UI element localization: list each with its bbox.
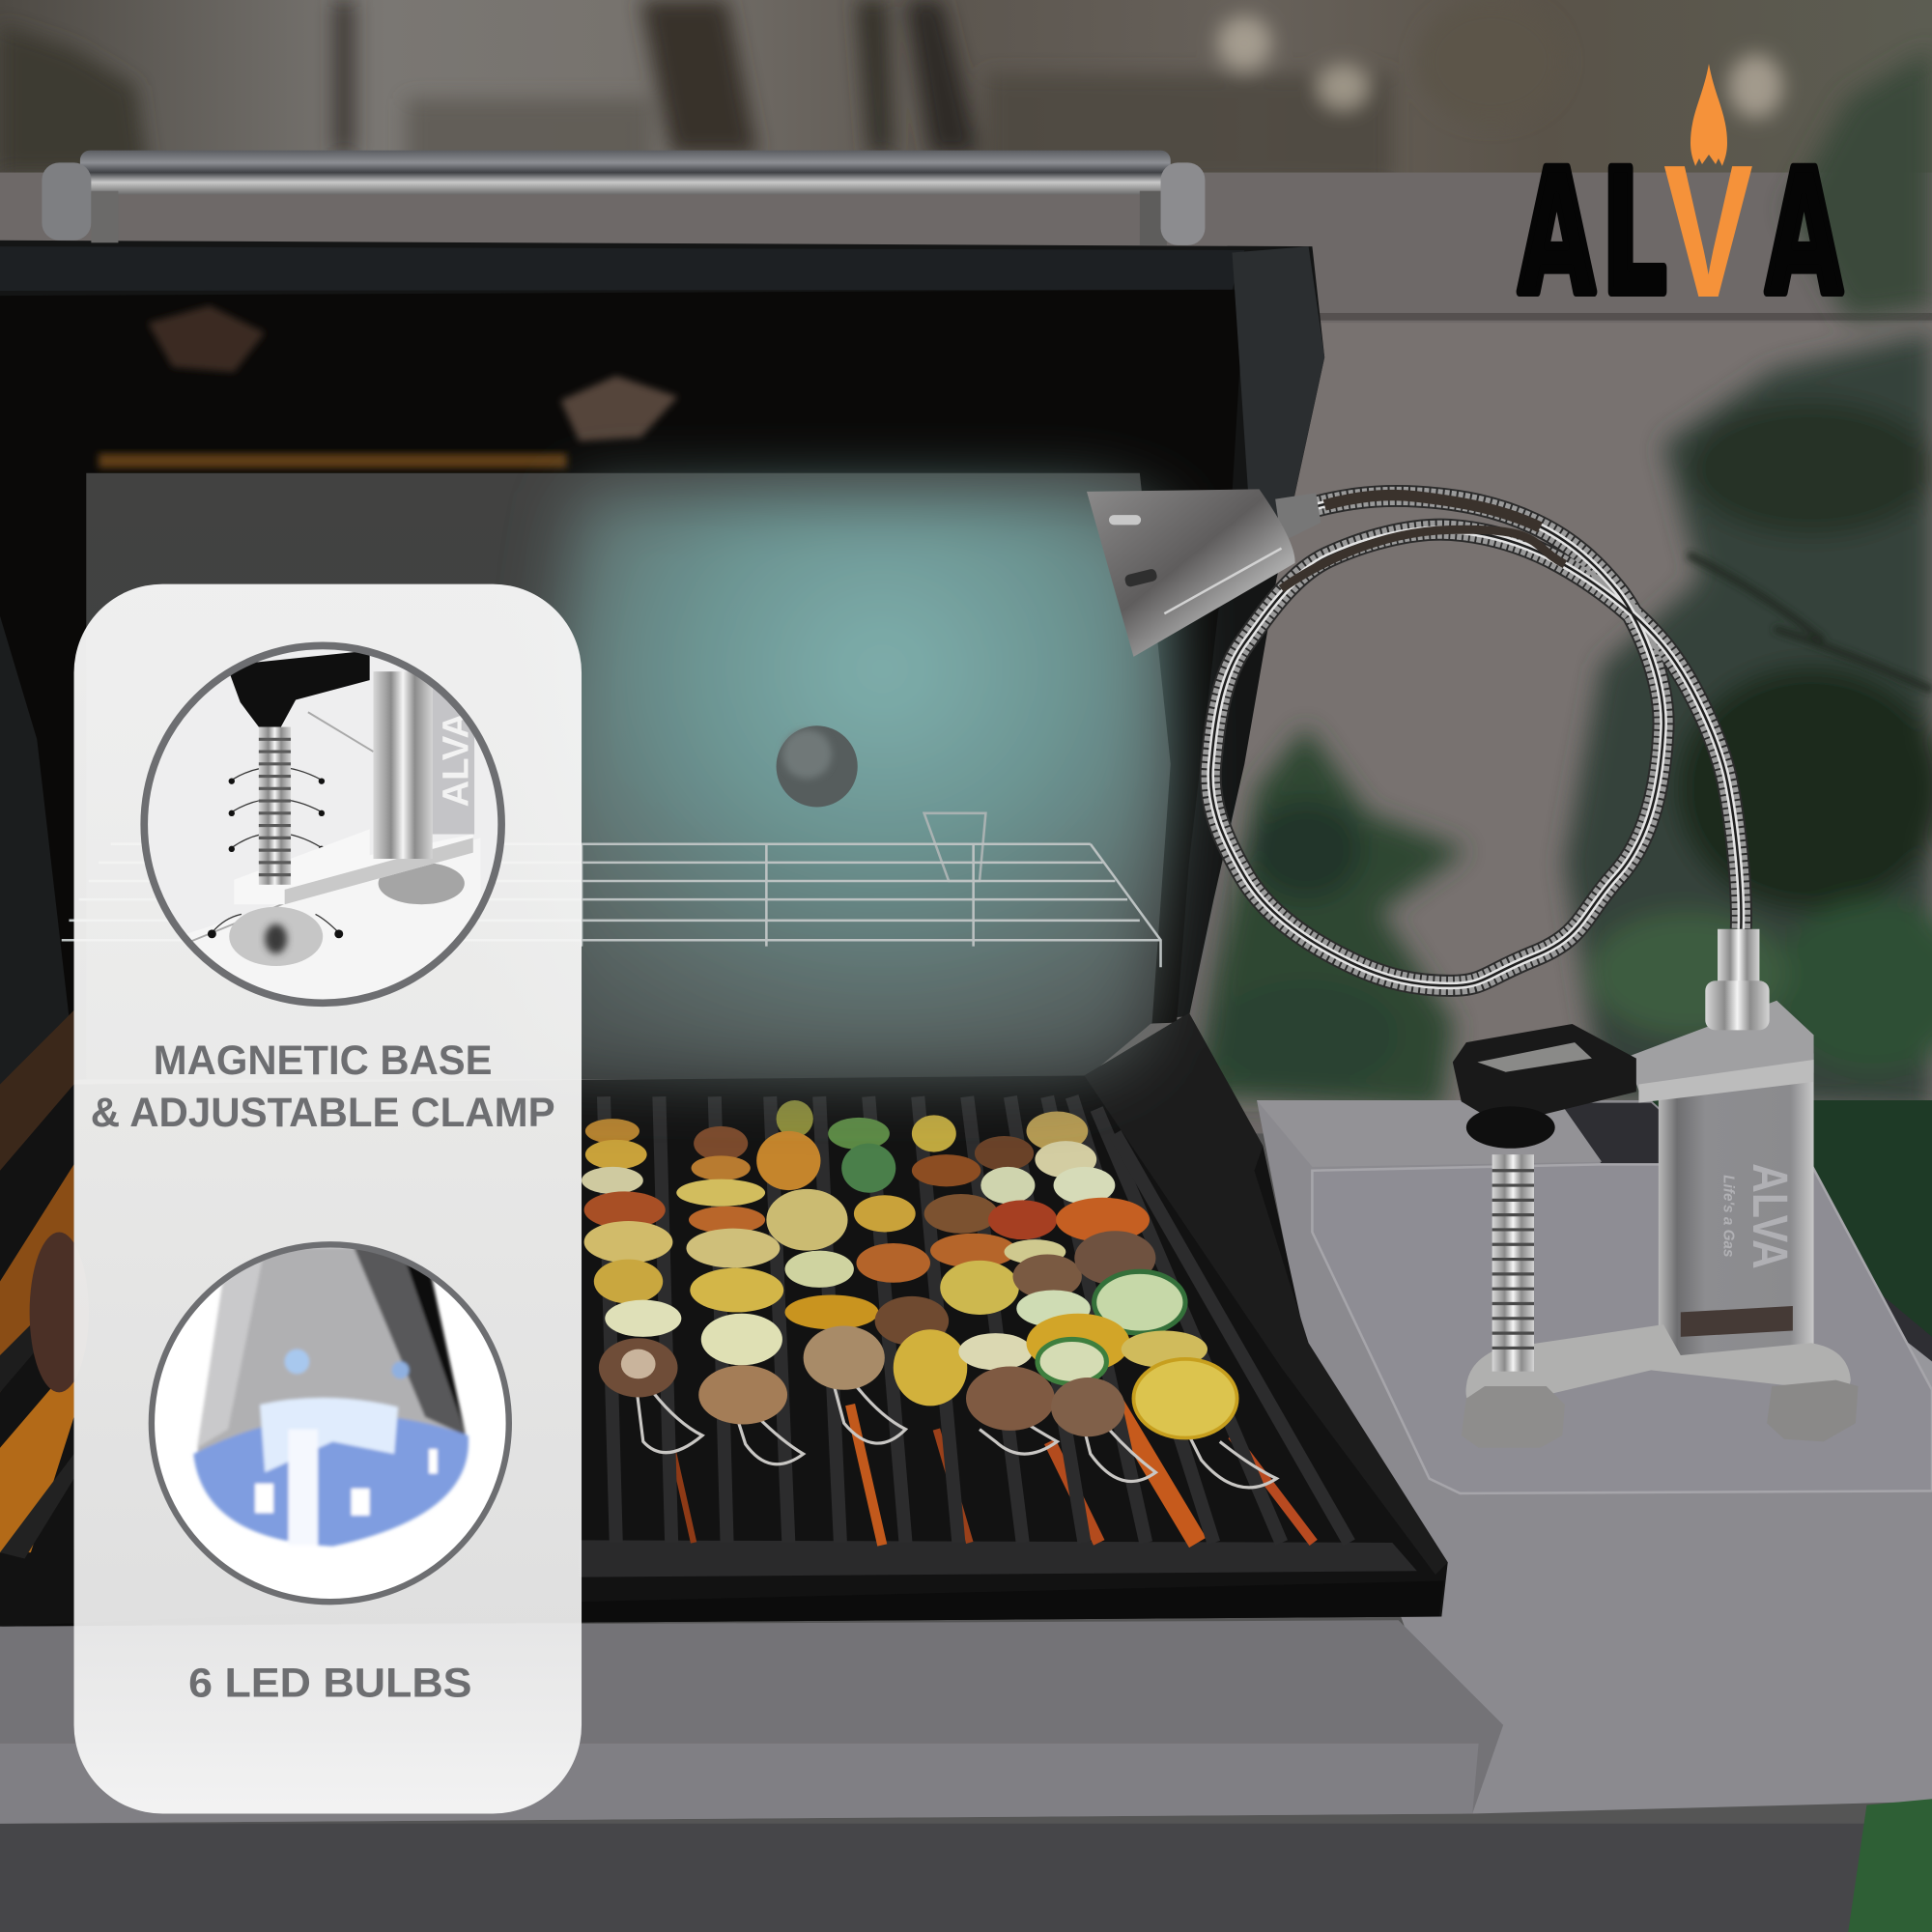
left side flames and steak (0, 1164, 89, 1559)
feature image: six LED bulbs (152, 1244, 509, 1602)
logo wordmark: L (1602, 135, 1666, 332)
feature caption: magnetic base: MAGNETIC BASE (154, 1037, 493, 1084)
grill body bottom (0, 1620, 1932, 1932)
grill cooking tray (0, 1012, 1448, 1627)
feature caption: magnetic base (91, 1037, 555, 1136)
feature caption: LED bulbs: 6 LED BULBS (188, 1660, 472, 1706)
grill lid (0, 241, 1324, 1084)
feature caption: magnetic base: & ADJUSTABLE CLAMP (91, 1090, 555, 1136)
fence wall (0, 173, 1932, 1133)
lamp collar (1718, 929, 1759, 985)
vegetable pieces (582, 1100, 1237, 1438)
tree branches (1688, 554, 1932, 690)
light beam from the lamp (529, 493, 1171, 1079)
logo wordmark: A (1519, 133, 1595, 332)
feature image: magnetic base and clamp: ALVA (436, 712, 477, 807)
firebox left wall (0, 616, 74, 1355)
feature card (74, 584, 582, 1814)
logo wordmark: V (1663, 127, 1753, 338)
flexible gooseneck tube (1210, 496, 1741, 985)
ALVA logo (1519, 64, 1842, 338)
screw (1492, 1154, 1534, 1372)
black knob (1453, 1024, 1636, 1125)
lamp head (1087, 489, 1321, 657)
vegetable skewers (582, 1100, 1276, 1488)
foot (1465, 1324, 1851, 1410)
clamp column (1659, 1054, 1814, 1361)
top plate (1627, 1001, 1814, 1091)
warming rack and knob (62, 725, 1161, 967)
clamp brand text: ALVA (1743, 1163, 1798, 1269)
clamp base (1453, 929, 1858, 1448)
magnet nuts (1462, 1386, 1565, 1448)
logo flame (1690, 64, 1727, 166)
side table and shelf (1257, 1100, 1932, 1814)
orange flame slits through the grate (666, 1405, 1314, 1545)
greenery on the right (1195, 49, 1932, 1109)
clamp brand text (1719, 1163, 1798, 1269)
backyard sky and blurred trees (0, 0, 1932, 197)
rotation arrows (212, 767, 339, 933)
logo wordmark (1519, 127, 1842, 338)
feature image: magnetic base and clamp (135, 640, 518, 1010)
skewer wire loops (637, 1386, 1276, 1488)
clamp brand text: Life's a Gas (1719, 1175, 1736, 1258)
grill handle (42, 151, 1205, 245)
grate bars (604, 1096, 1350, 1543)
logo wordmark: A (1766, 133, 1842, 332)
